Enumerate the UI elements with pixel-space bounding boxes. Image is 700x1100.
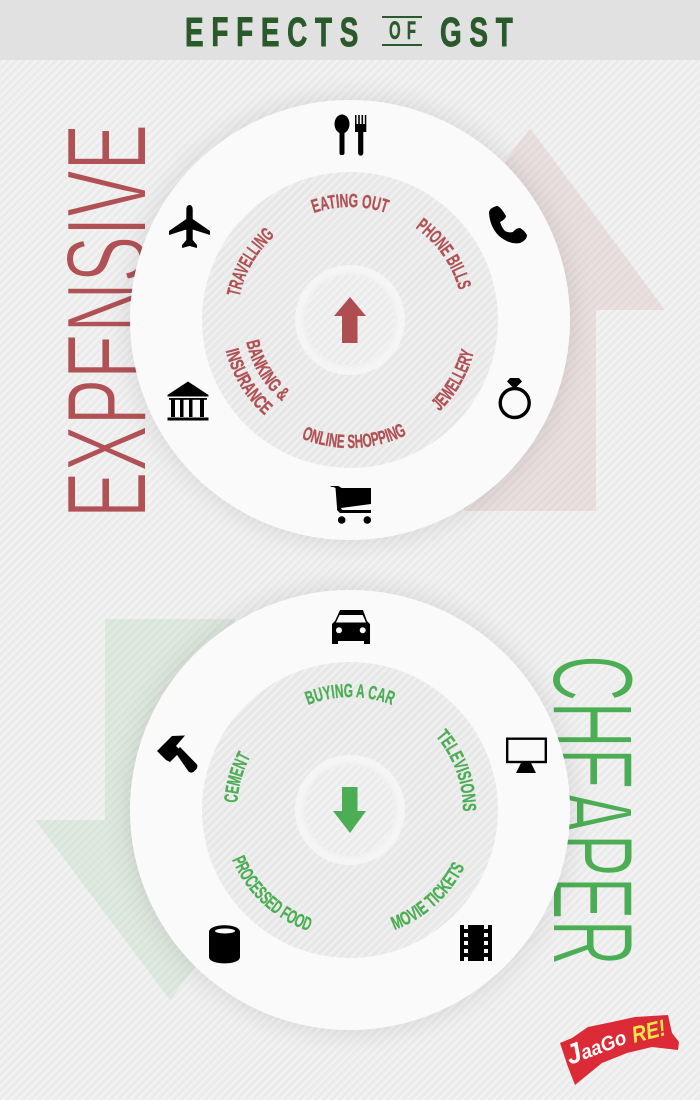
- label: online shopping: ONLINE SHOPPING: [303, 424, 406, 448]
- label: banking and insurance: [226, 339, 288, 416]
- label: jewellery: JEWELLERY: [432, 348, 474, 410]
- icon: down arrow: [333, 787, 366, 833]
- label: travelling: TRAVELLING: [226, 228, 274, 294]
- header band: [0, 0, 700, 60]
- panel: cheaper wheel: [124, 582, 578, 1038]
- label: buying a car: BUYING A CAR: [304, 684, 395, 706]
- background arrow: up: [395, 128, 665, 511]
- icon: up arrow: [334, 297, 366, 343]
- panel: expensive wheel: [122, 92, 576, 548]
- label: banking and insurance: INSURANCE: [226, 348, 274, 416]
- logo: Jaago Re: JaaGo: [561, 1019, 630, 1071]
- label: cement: CEMENT: [224, 750, 250, 802]
- title: OF: [389, 17, 416, 45]
- icon: film: [460, 925, 492, 961]
- icon: cart: [330, 486, 371, 524]
- icon: can: [209, 925, 240, 963]
- title: GST: [440, 10, 513, 55]
- background arrow: down: [35, 619, 305, 1000]
- title: [185, 10, 513, 55]
- label: movie tickets: MOVIE TICKETS: [390, 862, 464, 930]
- title: EFFECTS: [185, 10, 358, 55]
- icon: bank: [168, 382, 208, 420]
- icon: hammer: [157, 736, 197, 773]
- label: televisions: TELEVISIONS: [437, 728, 476, 811]
- logo: Jaago Re: [560, 1014, 679, 1085]
- icon: ring: [500, 378, 529, 418]
- label: processed food: PROCESSED FOOD: [232, 854, 312, 930]
- label: banking and insurance: BANKING &: [246, 339, 288, 402]
- logo: Jaago Re: RE!: [629, 1014, 668, 1048]
- label: eating out: EATING OUT: [310, 194, 390, 213]
- icon: monitor: [507, 739, 546, 773]
- label: phone bills: PHONE BILLS: [416, 218, 471, 290]
- icon: phone: [489, 206, 527, 243]
- icon: plane: [169, 205, 210, 248]
- icon: spoon and fork: [334, 114, 366, 156]
- icon: car: [332, 610, 370, 644]
